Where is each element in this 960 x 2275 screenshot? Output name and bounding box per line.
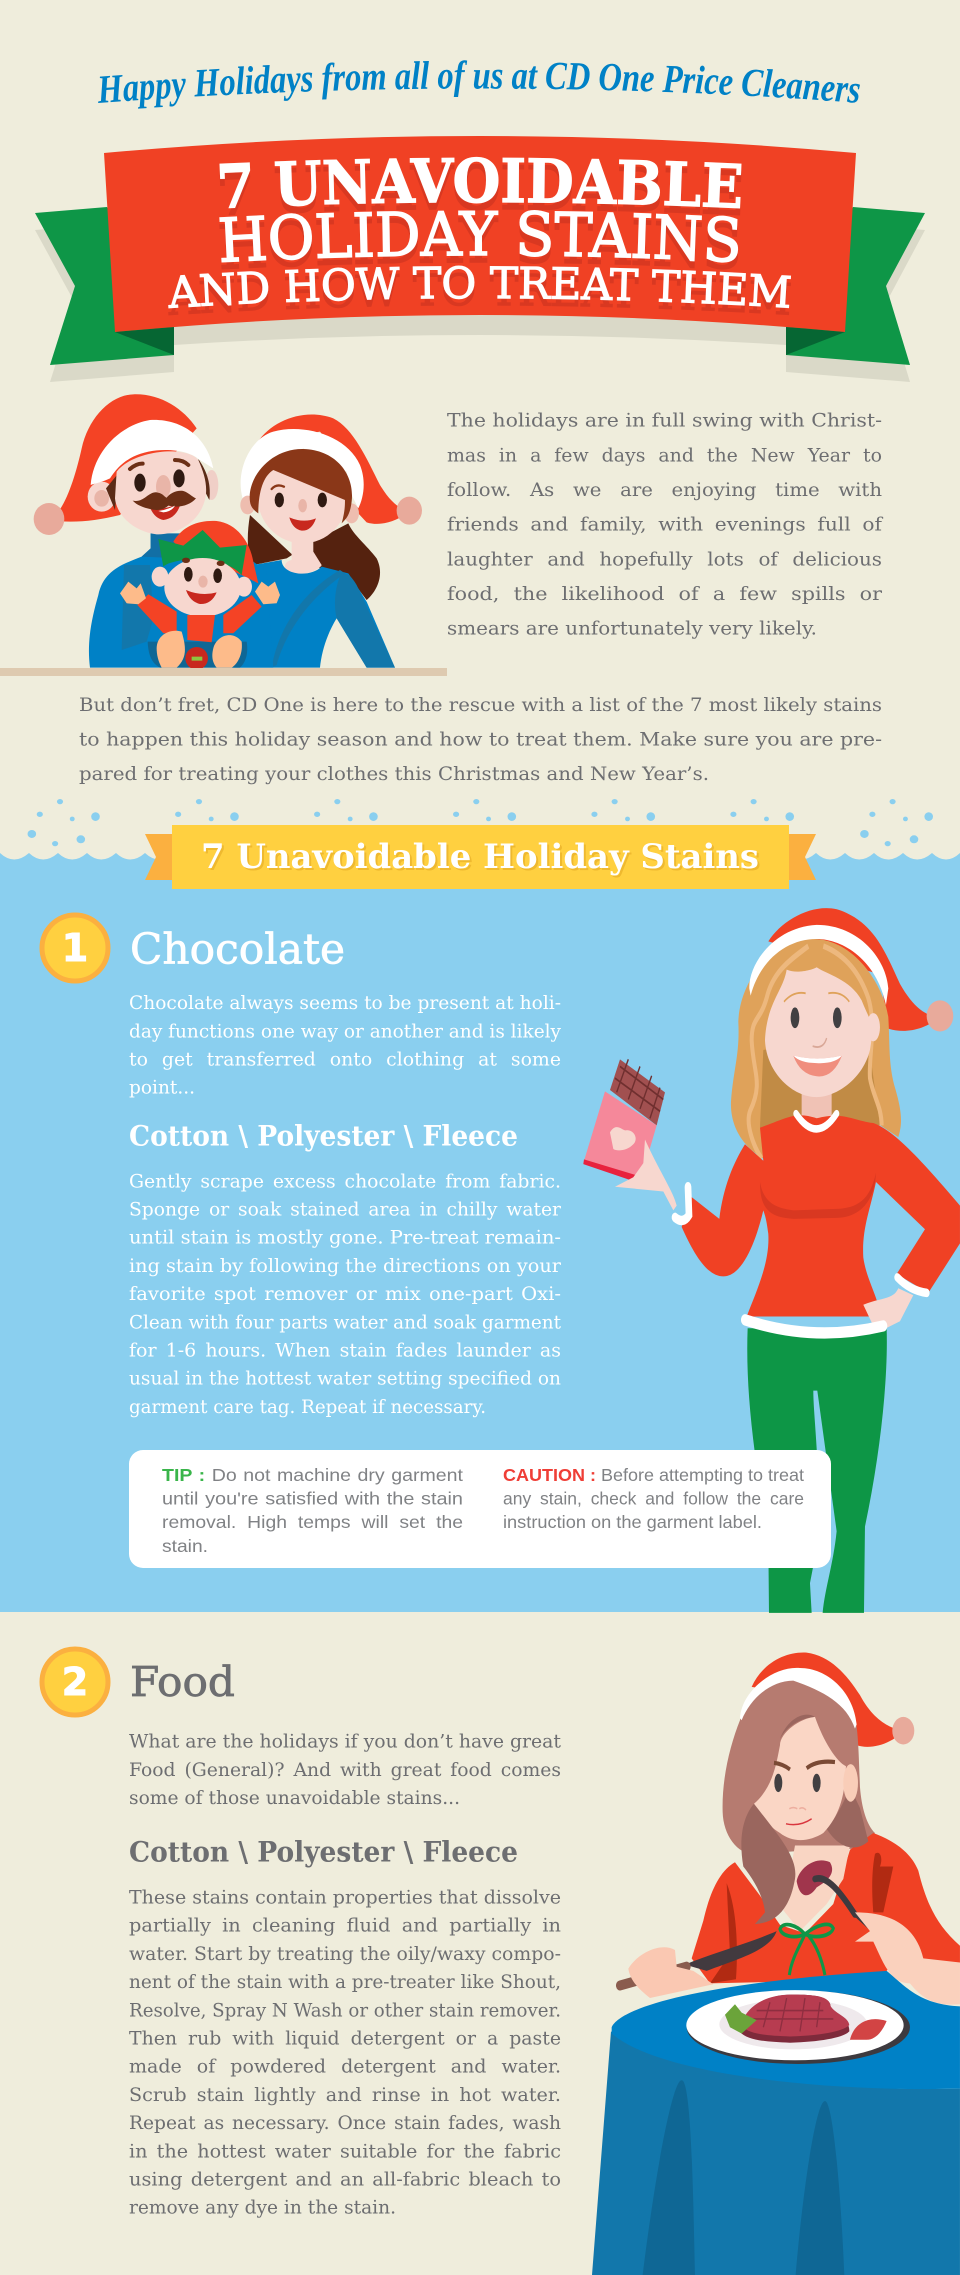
section heading ribbon: 7 Unavoidable Holiday Stains (201, 837, 759, 877)
intro paragraph two: pared for treating your clothes this Christmas and New Year’s. (79, 763, 709, 785)
chocolate treatment text: Gently scrape excess chocolate from fabric. (129, 1170, 561, 1192)
number badge 1 (42, 915, 108, 981)
tip text: until you're satisfied with the stain (162, 1489, 463, 1509)
title text: AND HOW TO TREAT THEM (168, 266, 792, 316)
chocolate intro text: day functions one way or another and is likely (129, 1020, 561, 1042)
title text (168, 156, 792, 316)
chocolate treatment text: usual in the hottest water setting specified on (129, 1368, 561, 1390)
tip text: removal. High temps will set the (162, 1512, 463, 1532)
food treatment text: These stains contain properties that dissolve (129, 1886, 561, 1908)
caution text (503, 1465, 804, 1532)
chocolate treatment text: favorite spot remover or mix one-part Oxi- (129, 1283, 561, 1305)
intro paragraph one: smears are unfortunately very likely. (447, 617, 817, 639)
chocolate intro text: Chocolate always seems to be present at holi- (129, 992, 561, 1014)
chocolate treatment text: garment care tag. Repeat if necessary. (129, 1396, 486, 1418)
intro paragraph one: The holidays are in full swing with Christ- (447, 410, 882, 432)
shelf under family (0, 668, 447, 676)
title text: HOLIDAY STAINS (219, 210, 738, 270)
food treatment text: remove any dye in the stain. (129, 2197, 396, 2219)
tip text: stain. (162, 1536, 208, 1556)
intro paragraph two (79, 694, 882, 785)
callout: tip and caution box (129, 1450, 831, 1568)
intro paragraph one (447, 410, 884, 639)
intro paragraph one: mas in a few days and the New Year to (447, 445, 882, 467)
number badge 1: 1 (62, 926, 88, 970)
snow dots (28, 799, 933, 846)
food intro text: What are the holidays if you don’t have great (129, 1731, 561, 1753)
chocolate treatment text: for 1-6 hours. When stain fades launder as (129, 1340, 561, 1362)
food intro text (129, 1731, 561, 1809)
food treatment text: Scrub stain lightly and rinse in hot water. (129, 2084, 561, 2106)
panel: blue section background with scalloped edge (0, 853, 960, 1612)
caution text: any stain, check and follow the care (503, 1489, 804, 1509)
chocolate treatment text (129, 1170, 562, 1418)
intro paragraph two: But don’t fret, CD One is here to the rescue with a list of the 7 most likely stains (79, 694, 882, 716)
chocolate intro text (129, 992, 561, 1099)
chocolate treatment text: ing stain by following the directions on your (129, 1255, 562, 1277)
chocolate treatment text: Sponge or soak stained area in chilly water (129, 1198, 562, 1220)
food treatment text: in the hottest water suitable for the fabric (129, 2140, 561, 2162)
greeting script heading: Happy Holidays from all of us at CD One Price Cleaners (98, 60, 860, 109)
illustration: woman eating steak at table (592, 1652, 960, 2275)
title text: 7 UNAVOIDABLE (220, 156, 742, 216)
number badge 2 (42, 1649, 108, 1715)
food treatment text: water. Start by treating the oily/waxy compo- (129, 1943, 561, 1965)
intro paragraph one: laughter and hopefully lots of delicious (447, 548, 882, 570)
section heading ribbon: 7 Unavoidable Holiday Stains (203, 839, 761, 879)
intro paragraph two: to happen this holiday season and how to treat them. Make sure you are pre- (79, 729, 882, 751)
chocolate intro text: to get transferred onto clothing at some (129, 1048, 561, 1070)
food treatment text: partially in cleaning fluid and partially in (129, 1915, 561, 1937)
food treatment text: using detergent and an all-fabric bleach to (129, 2169, 561, 2191)
food fabric heading: Cotton \ Polyester \ Fleece (129, 1836, 518, 1869)
intro paragraph one: follow. As we are enjoying time with (447, 479, 882, 501)
number badge 2: 2 (62, 1660, 88, 1704)
caution text: instruction on the garment label. (503, 1512, 762, 1532)
food treatment text (129, 1886, 561, 2219)
chocolate fabric heading: Cotton \ Polyester \ Fleece (129, 1119, 518, 1152)
intro paragraph one: food, the likelihood of a few spills or (447, 583, 883, 605)
heading: food: Food (130, 1658, 235, 1706)
section heading ribbon (145, 825, 816, 889)
chocolate intro text: point... (129, 1077, 195, 1099)
food treatment text: made of powdered detergent and water. (129, 2056, 561, 2078)
tip text: TIP : Do not machine dry garment (162, 1465, 463, 1485)
tip text (162, 1465, 463, 1556)
food treatment text: Then rub with liquid detergent or a paste (129, 2027, 561, 2049)
food intro text: Food (General)? And with great food comes (129, 1759, 561, 1781)
chocolate treatment text: until stain is mostly gone. Pre-treat remain- (129, 1227, 561, 1249)
food treatment text: nent of the stain with a pre-treater like Shout, (129, 1971, 561, 1993)
food intro text: some of those unavoidable stains... (129, 1787, 460, 1809)
food treatment text: Repeat as necessary. Once stain fades, wash (129, 2112, 561, 2134)
chocolate treatment text: Clean with four parts water and soak garment (129, 1311, 561, 1333)
illustration: family in santa hats (34, 394, 422, 670)
illustration: woman holding chocolate bar (583, 908, 960, 1613)
heading: chocolate: Chocolate (130, 924, 345, 973)
caution text: CAUTION : Before attempting to treat (503, 1465, 804, 1485)
food treatment text: Resolve, Spray N Wash or other stain remover. (129, 1999, 561, 2021)
title ribbon banner (35, 136, 925, 382)
intro paragraph one: friends and family, with evenings full of (447, 514, 884, 536)
